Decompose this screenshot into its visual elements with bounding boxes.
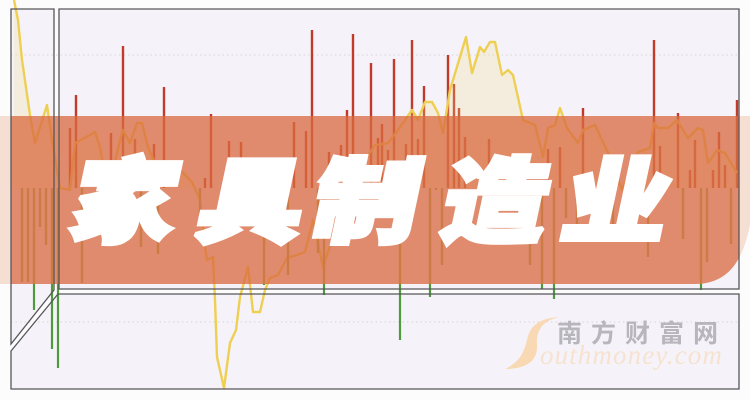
title: 造 [433, 151, 560, 255]
title: 制 [304, 151, 431, 255]
watermark: southmoney logo [505, 317, 727, 370]
title: 具 [189, 151, 316, 255]
chart: yellow area under line [14, 0, 737, 200]
icon: S swoosh [505, 317, 560, 369]
chart: falling green bars [22, 188, 731, 368]
watermark domain: outhmoney.com [540, 340, 723, 370]
dotted grid lines [11, 55, 739, 322]
title [62, 151, 681, 255]
title: 家 [62, 151, 189, 255]
watermark Chinese name: 南方财富网 [557, 319, 727, 348]
chart: rising red bars [70, 30, 737, 188]
title: 业 [554, 151, 681, 255]
title band [0, 116, 750, 284]
falling bars seen through the band [22, 188, 731, 284]
